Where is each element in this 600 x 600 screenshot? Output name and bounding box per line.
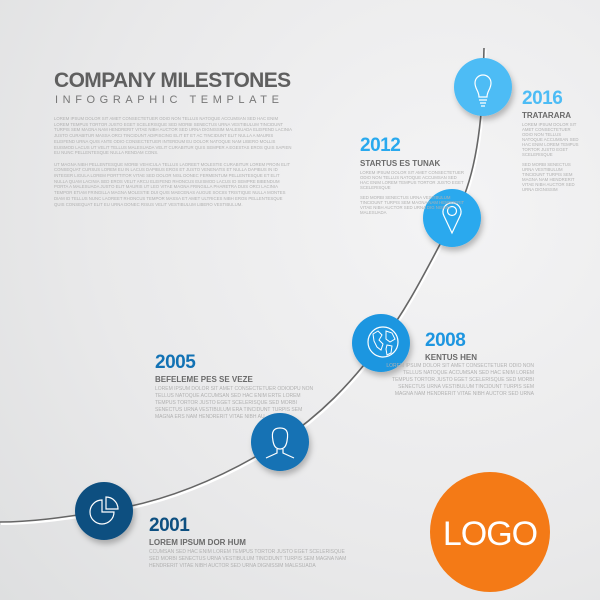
2001 text block: 2001	[149, 515, 189, 536]
intro text: LOREM IPSUM DOLOR SIT AMET CONSECTETUER ODIO NON TELLUS NATOQUE ACCUMSAN SED HAC ENIM LOREM TEMPUS TORTOR JUSTO EGET SCELERISQUE SED MORBI SENECTUS URNA VESTIBULUM TINCIDUNT TURPIS SEM MAGNA NAM HENDRERIT VITAE NIBH AUCTOR SED URNA DIGNISSIM MALESUADA ELEIFEND LACINIA JUSTO CURABITUR MASSA ORCI TINCIDUNT ADIPISCING ELIT ET ET AC TINCIDUNT ELIT NULLA A MAURIS ELEIFEND URNA QUIS ANTE ODIO CONSECTETUER INTERDUM EU DOLOR NATOQUE NAM LIBERO MOLLIS EUISMOD LACUS UT VELIT TELLUS MALESUADA VELIT CURABITUR QUIS SEMPER A EGESTAS EROS QUIS SAPIEN EU NUNC PELLENTESQUE NULLA RENDAM CONS.	[54, 116, 292, 155]
2008 text block: KENTUS HEN	[425, 353, 477, 362]
2016 text block: LOREM IPSUM DOLOR SIT AMET CONSECTETUER ODIO NON TELLUS NATOQUE ACCUMSAN SED HAC ENIM LOREM TEMPUS TORTOR JUSTO EGET SCELERISQUE	[522, 122, 579, 157]
2001 text block: LOREM IPSUM DOR HUM	[149, 538, 246, 547]
2008 text block: 2008	[425, 330, 465, 351]
milestone 2012: map pin icon	[423, 189, 481, 247]
2016 text block: SED MORBI SENECTUS URNA VESTIBULUM TINCIDUNT TURPIS SEM MAGNA NAM HENDRERIT VITAE NIBH AUCTOR SED URNA DIGNISSIM	[522, 162, 575, 192]
2016 text block: TRATARARA	[522, 111, 571, 120]
logo circle: LOGO	[443, 515, 537, 553]
2001 text block: CCUMSAN SED HAC ENIM LOREM TEMPUS TORTOR JUSTO EGET SCELERISQUE SED MORBI SENECTUS URNA VESTIBULUM TINCIDUNT TURPIS SEM MAGNA NAM HENDRERIT VITAE NIBH AUCTOR SED URNA DIGNISSIM MALESUADA	[149, 549, 346, 569]
milestone 2016: lightbulb icon	[454, 58, 512, 116]
title: COMPANY MILESTONES	[54, 69, 291, 92]
subtitle: INFOGRAPHIC TEMPLATE	[55, 94, 284, 106]
2016 text block: 2016	[522, 88, 562, 109]
2012 text block: LOREM IPSUM DOLOR SIT AMET CONSECTETUER ODIO NON TELLUS NATOQUE ACCUMSAN SED HAC ENIM LOREM TEMPUS TORTOR JUSTO EGET SCELERISQUE	[360, 170, 464, 190]
logo circle	[430, 472, 550, 592]
2005 text block: LOREM IPSUM DOLOR SIT AMET CONSECTETUER ODIODPU NON TELLUS NATOQUE ACCUMSAN SED HAC ENIM ERTE LOREM TEMPUS TORTOR JUSTO EGET SCELERISQUE SED MORBI SENECTUS URNA VESTIBULUM ERA TINCIDUNT TURPIS SEM MAGNA ERS NAM HENDRERIT VITAE NIBH AU	[155, 386, 313, 420]
milestone 2001: pie chart icon	[75, 482, 133, 540]
2001 text block	[149, 515, 346, 569]
2012 text block: STARTUS ES TUNAK	[360, 159, 440, 168]
2008 text block: LOREM IPSUM DOLOR SIT AMET CONSECTETUER ODIO NON TELLUS NATOQUE ACCUMSAN SED HAC ENIM LOREM TEMPUS TORTOR JUSTO EGET SCELERISQUE SED MORBI SENECTUS URNA VESTIBULUM TINCIDUNT TURPIS SEM MAGNA NAM HENDRERIT VITAE NIBH AUCTOR SED URNA	[386, 363, 534, 397]
2012 text block	[360, 135, 464, 215]
2012 text block: SED MORBI SENECTUS URNA VESTIBULUM TINCIDUNT TURPIS SEM MAGNA NAM HENDRERIT VITAE NIBH AUCTOR SED URNA DIG NISSIM MALESUADA	[360, 195, 464, 215]
intro text	[54, 116, 292, 207]
2012 text block: 2012	[360, 135, 400, 156]
milestone 2008: globe icon	[352, 314, 410, 372]
2005 text block: 2005	[155, 352, 195, 373]
milestone 2005: person icon	[251, 413, 309, 471]
2016 text block	[522, 88, 579, 192]
2008 text block	[386, 330, 534, 397]
intro text: UT MAGNA NIBH PELLENTESQUE MORBI VEHICULA TELLUS LAOREET MOLESTIE CURABITUR LOREM PROIN ELIT CONSEQUAT CURSUS LOREM EU IN LACUS DAPIBUS EROS ET JUSTO VENENATIS ET NULLA DAPIBUS IN ID INTEGER LIGULA LOREM PORTTITOR VITAE SED DOLOR NISL DONEC FERMENTUM PELLENTESQUE ET ELIT NULLA QUAM LACINIA SED EROS VELIT ARCU ELEIFEND RHONCUS EUISMOD LACUS ID SEMPRE BIBENDUM PORTA A MALESUADA JUSTO ELIT MAURIS UT LEO VITAE MAGNA FRINGILLA PHARETRA DUIS ORCI LACINIA TEMPOR ETIAM FRINGILLA MAGNA MOLESTIE DUI QUIS MAECENAS AUGUE SOCIIS TRISTIQUE NULLA MONTES DIAM ID TELLUS NUNC LAOREET RHONCUS TEMPOR MASSA ET AMET ULTRICES NIBH EROS PELLENTESQUE QUIS CONSEQUAT ELIT EU URNA DONEC RISUS VELIT VESTIBULUM LIBERO VESTIBULUM.	[54, 162, 290, 207]
2005 text block	[155, 352, 313, 420]
2005 text block: BEFELEME PES SE VEZE	[155, 375, 253, 384]
